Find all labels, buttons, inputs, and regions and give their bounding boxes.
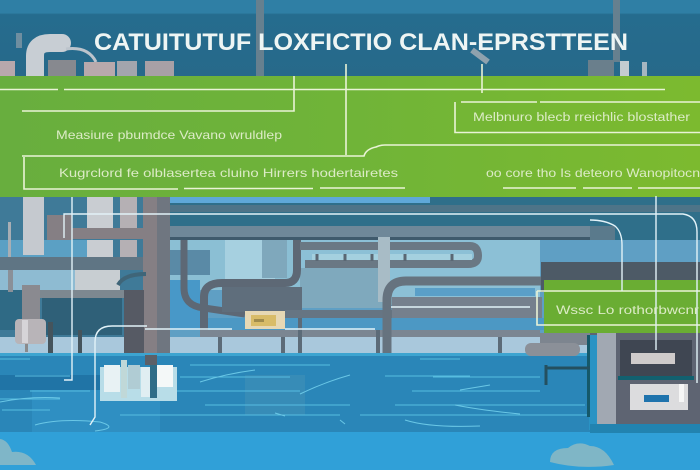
title: CATUITUTUF LOXFICTIO CLAN-EPRSTTEEN (94, 29, 628, 56)
factory rooftop pipes (0, 33, 647, 76)
bottom water band (0, 432, 700, 470)
pipe network (170, 205, 700, 380)
tank and machine housing left (22, 274, 146, 386)
green band panel (0, 76, 700, 197)
water (0, 353, 700, 433)
text: measure line: Measiure pbumdce Vavano wruldlep (56, 128, 282, 142)
thin pale connector lines (64, 196, 697, 425)
cloud right (550, 443, 614, 467)
cloud left (0, 439, 36, 465)
connector lines (0, 64, 700, 325)
label chip (245, 311, 285, 329)
right machine (525, 262, 700, 433)
sky header background (0, 0, 700, 76)
text: right box line: Melbnuro blecb rreichlic blostather (473, 112, 690, 124)
green callout right (544, 280, 700, 333)
text: right lower line: oo core tho Is deteoro Wanopitocn (486, 166, 700, 180)
towers and columns left (0, 197, 170, 357)
text: left box line: Kugrclord fe olblasertea cluino Hirrers hodertairetes (59, 166, 398, 180)
factory background (0, 197, 700, 355)
text: callout line: Wssc Lo rothorbwcnr (556, 303, 699, 317)
white blocks in water (100, 355, 177, 401)
silver canister (15, 319, 46, 352)
